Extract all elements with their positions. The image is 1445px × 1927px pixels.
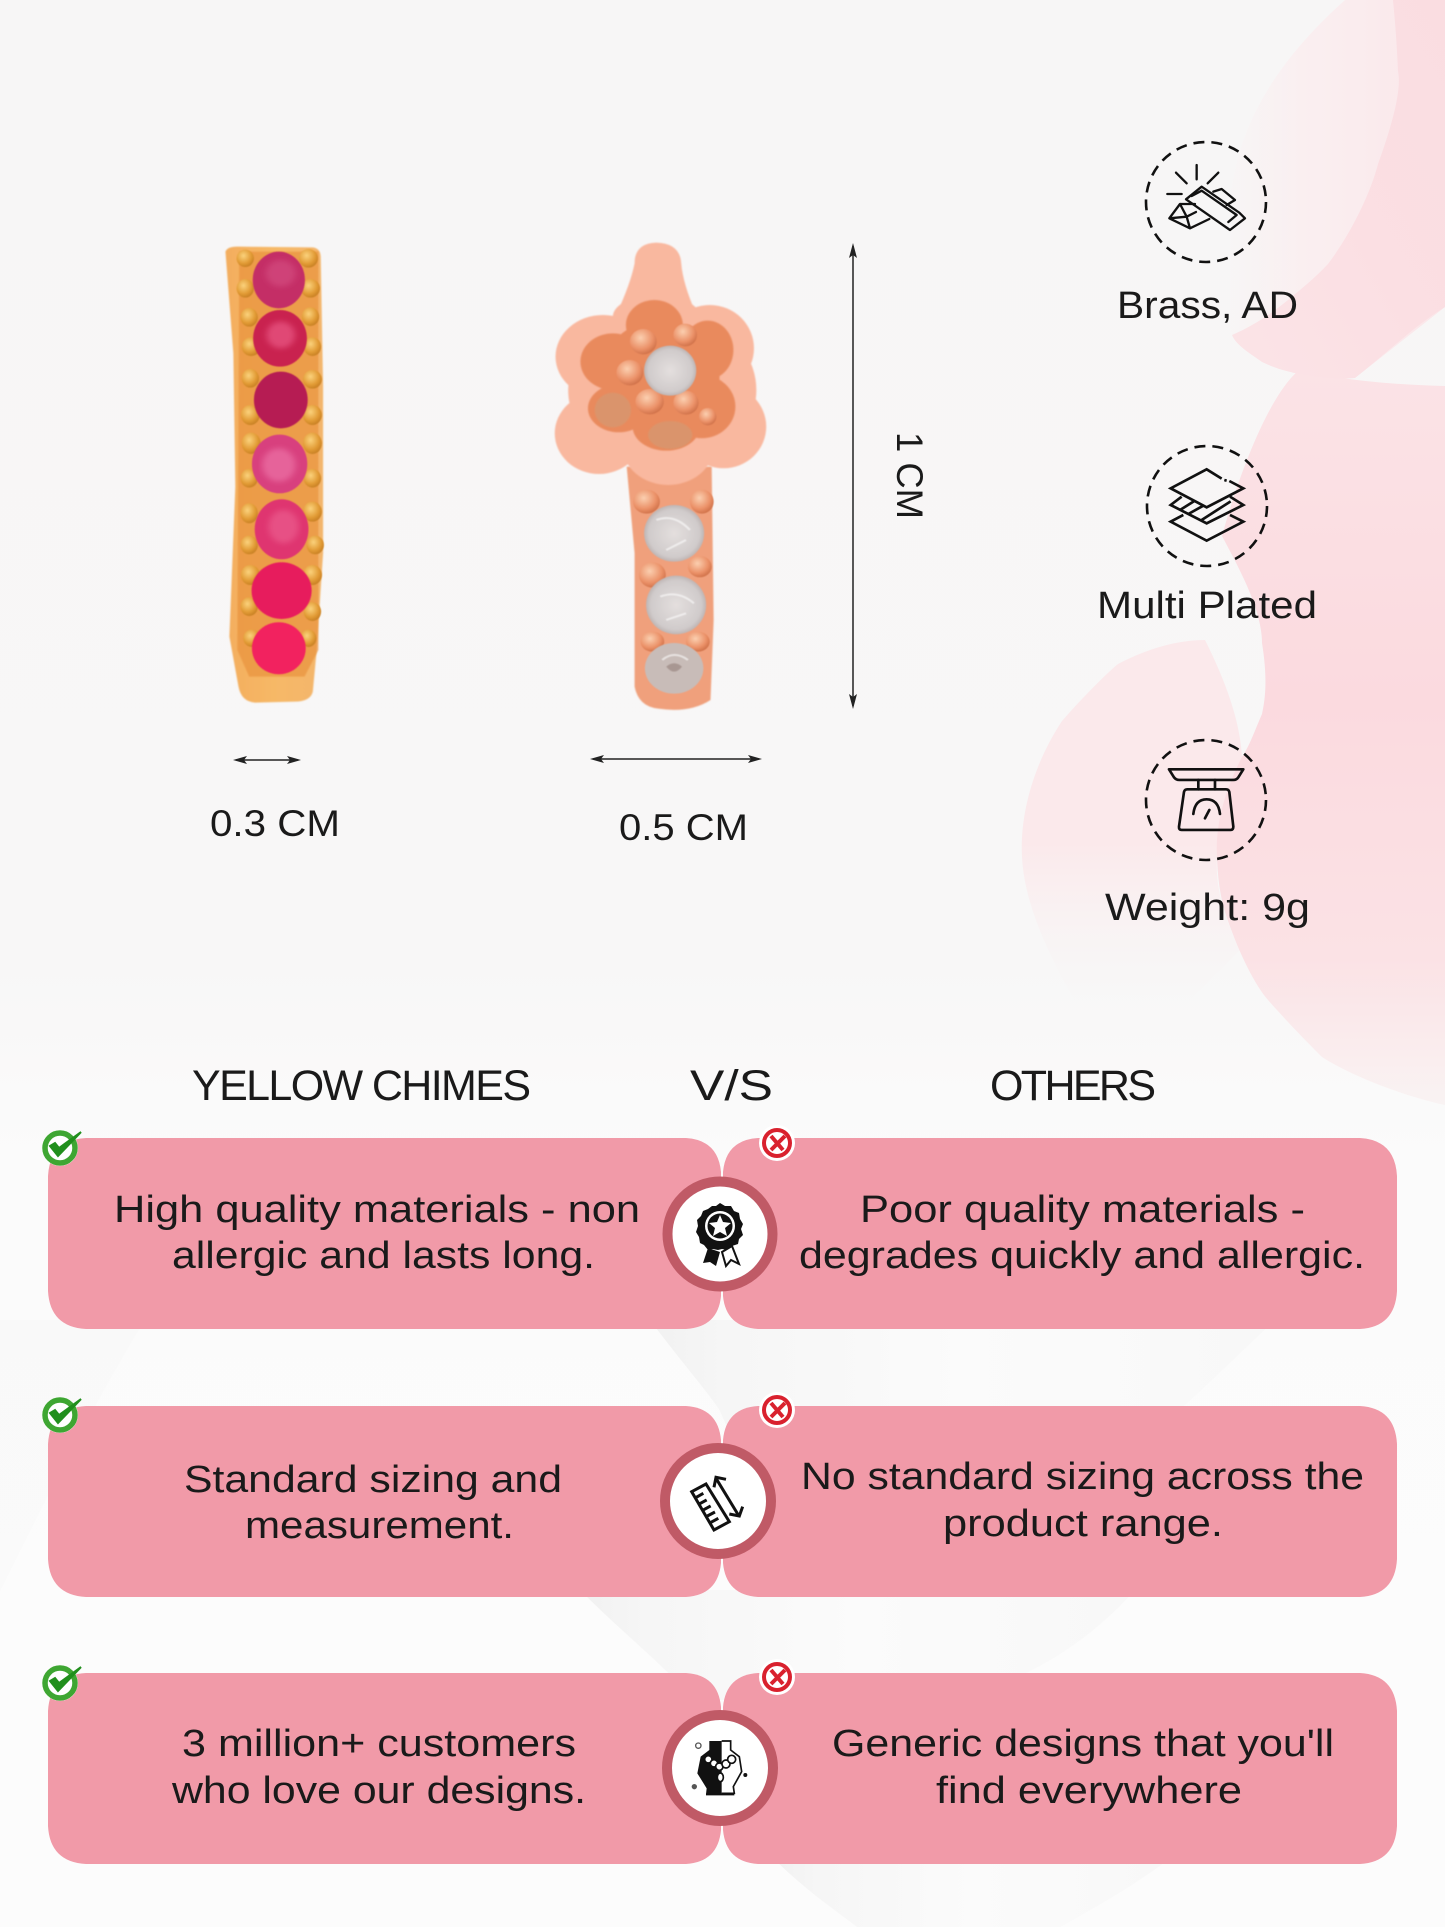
icon: layers <box>1171 469 1243 541</box>
earring: rose gold flower <box>555 243 766 710</box>
icon: gold bars <box>1167 165 1245 230</box>
text: standard sizing: measurement. <box>245 1505 514 1547</box>
icon: badge <box>668 1182 772 1286</box>
label: 0.3 CM: 0.3 CM <box>210 803 340 844</box>
arrow: 1 cm height <box>849 243 857 709</box>
text: high quality: High quality materials - non <box>114 1189 640 1231</box>
icon: necklace bust <box>667 1715 773 1821</box>
text: no standard sizing: No standard sizing across the <box>801 1456 1364 1498</box>
label: Brass, AD <box>1117 285 1298 327</box>
text: 3 million customers: who love our designs. <box>171 1770 586 1812</box>
icon: green check <box>42 1665 81 1701</box>
text: high quality: allergic and lasts long. <box>172 1235 595 1277</box>
panel: yellow chimes customers <box>48 1673 721 1864</box>
text: generic designs: Generic designs that you'll <box>832 1723 1334 1765</box>
label: Weight: 9g <box>1105 887 1310 929</box>
panel: others designs <box>723 1673 1397 1864</box>
icon: red cross <box>759 1392 795 1428</box>
text: standard sizing: Standard sizing and <box>184 1459 562 1501</box>
text: poor quality: degrades quickly and allergic. <box>799 1235 1365 1277</box>
panel: yellow chimes materials <box>48 1138 721 1329</box>
feature: Brass, AD <box>1117 142 1298 327</box>
label: 1 CM: 1 CM <box>889 432 930 519</box>
panel: others materials <box>723 1138 1397 1329</box>
text: 3 million customers: 3 million+ customers <box>182 1723 576 1765</box>
icon: green check <box>42 1130 81 1166</box>
heading: OTHERS: OTHERS <box>990 1062 1156 1110</box>
icon: scale <box>1169 769 1243 830</box>
icon: red cross <box>759 1659 795 1695</box>
heading: V/S: V/S <box>690 1062 773 1110</box>
icon: red cross <box>759 1125 795 1161</box>
comparison row 1 <box>42 1125 1397 1329</box>
arrow: 0.3 cm width <box>233 756 301 764</box>
earring: ruby bar <box>225 247 324 703</box>
feature: Weight 9g <box>1105 740 1310 929</box>
text: poor quality: Poor quality materials - <box>860 1189 1305 1231</box>
icon: green check <box>42 1397 81 1433</box>
label: 0.5 CM: 0.5 CM <box>619 807 748 848</box>
panel: yellow chimes sizing <box>48 1406 721 1597</box>
arrow: 0.5 cm width <box>590 755 762 763</box>
text: no standard sizing: product range. <box>943 1503 1223 1545</box>
icon: ruler and arrow <box>665 1448 771 1554</box>
text: generic designs: find everywhere <box>936 1770 1242 1812</box>
panel: others sizing <box>723 1406 1397 1597</box>
heading: YELLOW CHIMES: YELLOW CHIMES <box>192 1062 531 1110</box>
label: Multi Plated <box>1097 585 1317 627</box>
comparison row 2 <box>42 1392 1397 1597</box>
comparison row 3 <box>42 1659 1397 1864</box>
feature: Multi Plated <box>1097 446 1317 627</box>
